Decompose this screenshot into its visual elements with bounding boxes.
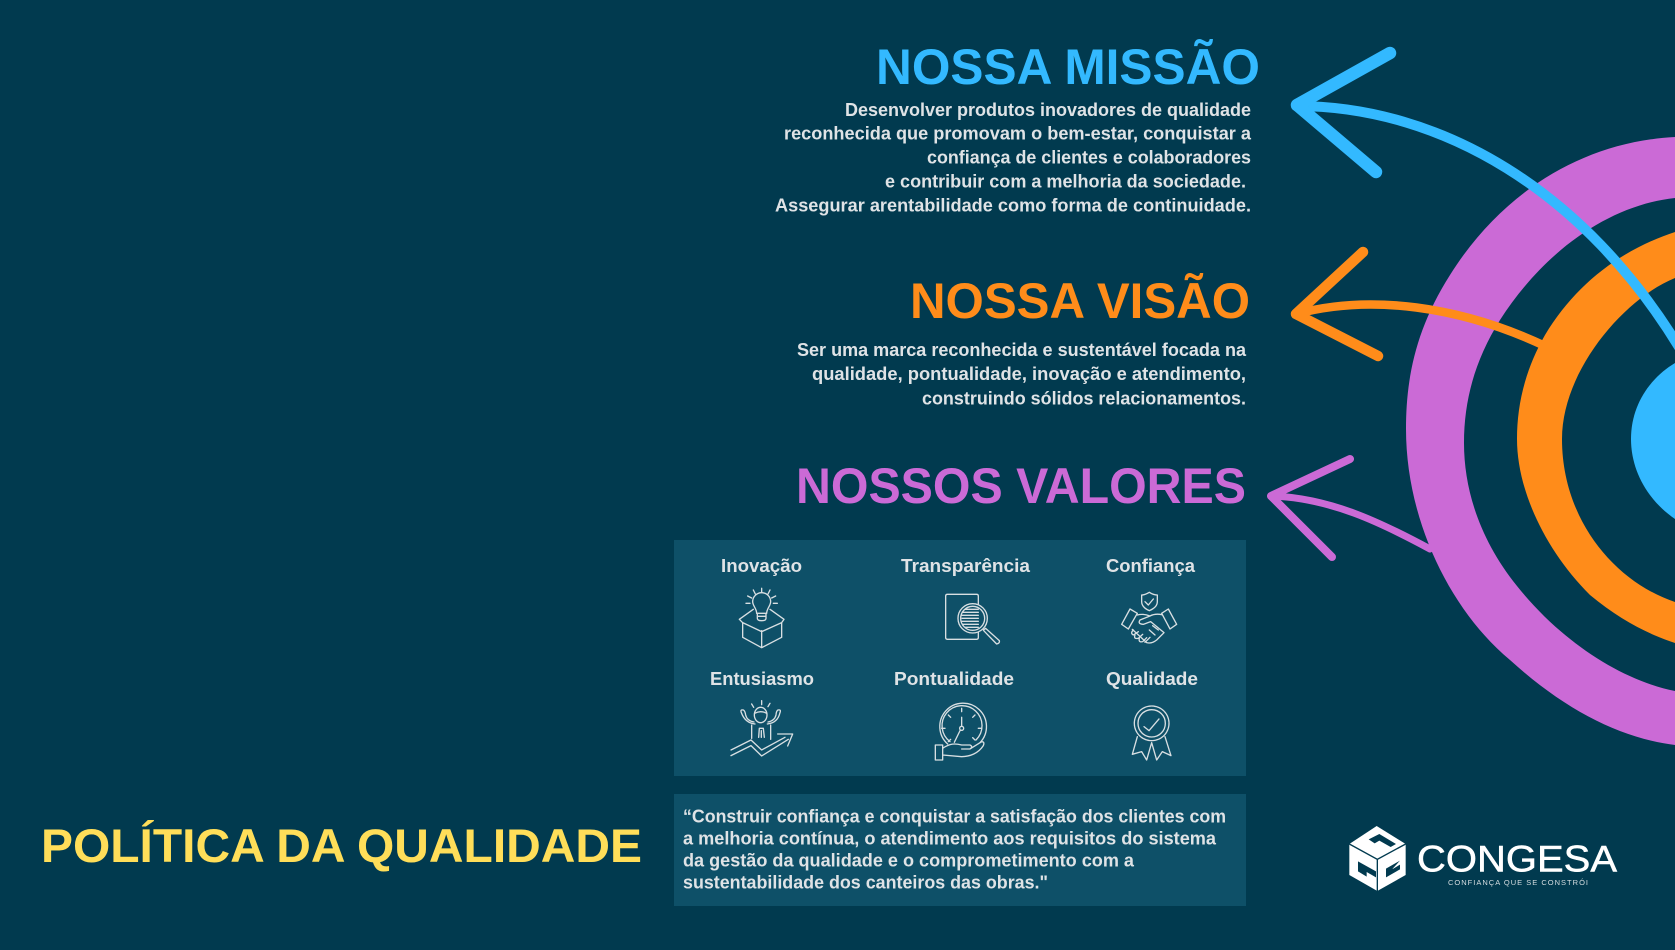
wordmark: CONGESA — [1417, 838, 1617, 880]
icon: award ribbon — [1132, 706, 1171, 760]
text block: mission: reconhecida que promovam o bem-estar, conquistar a — [784, 124, 1252, 144]
heading: mission: NOSSA MISSÃO — [876, 38, 1260, 95]
panel: quality policy quote — [674, 794, 1246, 906]
arrow: orange to vision — [1296, 252, 1545, 356]
panel: vision — [797, 272, 1250, 408]
value: Qualidade: Qualidade — [1106, 668, 1198, 689]
heading: vision: NOSSA VISÃO — [910, 272, 1250, 329]
text block: vision — [797, 340, 1247, 408]
arrow: blue to mission — [1296, 53, 1675, 352]
value: Confiança — [1106, 555, 1196, 643]
target centre: blue — [1631, 363, 1675, 519]
concentric target rings — [1271, 53, 1675, 745]
value: Transparência — [901, 555, 1031, 644]
quote text: a melhoria contínua, o atendimento aos requisitos do sistema — [683, 829, 1217, 849]
value: Transparência: Transparência — [901, 555, 1031, 576]
panel: values grid — [674, 540, 1246, 776]
quote text: “Construir confiança e conquistar a satisfação dos clientes com — [683, 807, 1226, 827]
text block: mission: Desenvolver produtos inovadores de qualidade — [845, 100, 1251, 120]
panel background — [674, 540, 1246, 776]
icon: clock on open hand — [935, 703, 986, 760]
quote background — [674, 794, 1246, 906]
value: Entusiasmo — [710, 668, 814, 756]
ring: orange — [1517, 232, 1675, 643]
value: Confiança: Confiança — [1106, 555, 1196, 576]
text block: mission: e contribuir com a melhoria da sociedade. — [885, 172, 1246, 192]
logo: Congesa — [1349, 826, 1617, 891]
icon: person celebrating over rising arrow — [731, 701, 793, 756]
value: Pontualidade — [894, 668, 1014, 760]
heading: values: NOSSOS VALORES — [796, 457, 1246, 514]
value: Qualidade — [1106, 668, 1198, 760]
value: Entusiasmo: Entusiasmo — [710, 668, 814, 689]
panel: mission — [775, 38, 1260, 216]
icon: document under magnifier — [946, 594, 999, 644]
text block: vision: Ser uma marca reconhecida e sustentável focada na — [797, 340, 1247, 360]
quote text — [683, 807, 1226, 893]
icon: light bulb in box — [739, 588, 784, 648]
value: Inovação: Inovação — [721, 555, 802, 576]
heading: quality policy: POLÍTICA DA QUALIDADE — [41, 819, 642, 872]
value: Inovação — [721, 555, 802, 648]
arrow: purple to values — [1271, 459, 1430, 557]
text block: vision: construindo sólidos relacionamentos. — [922, 388, 1246, 408]
ring: purple — [1406, 137, 1675, 745]
text block: mission: Assegurar arentabilidade como forma de continuidade. — [775, 196, 1251, 216]
value: Pontualidade: Pontualidade — [894, 668, 1014, 689]
quote text: sustentabilidade dos canteiros das obras." — [683, 873, 1048, 893]
tagline: CONFIANÇA QUE SE CONSTRÓI — [1448, 878, 1588, 887]
text block: mission — [775, 100, 1252, 216]
text block: vision: qualidade, pontualidade, inovação e atendimento, — [812, 364, 1246, 384]
quote text: da gestão da qualidade e o comprometimento com a — [683, 851, 1135, 871]
text block: mission: confiança de clientes e colaboradores — [927, 148, 1251, 168]
icon: handshake and shield — [1122, 592, 1177, 643]
icon: cube logo — [1349, 826, 1406, 891]
